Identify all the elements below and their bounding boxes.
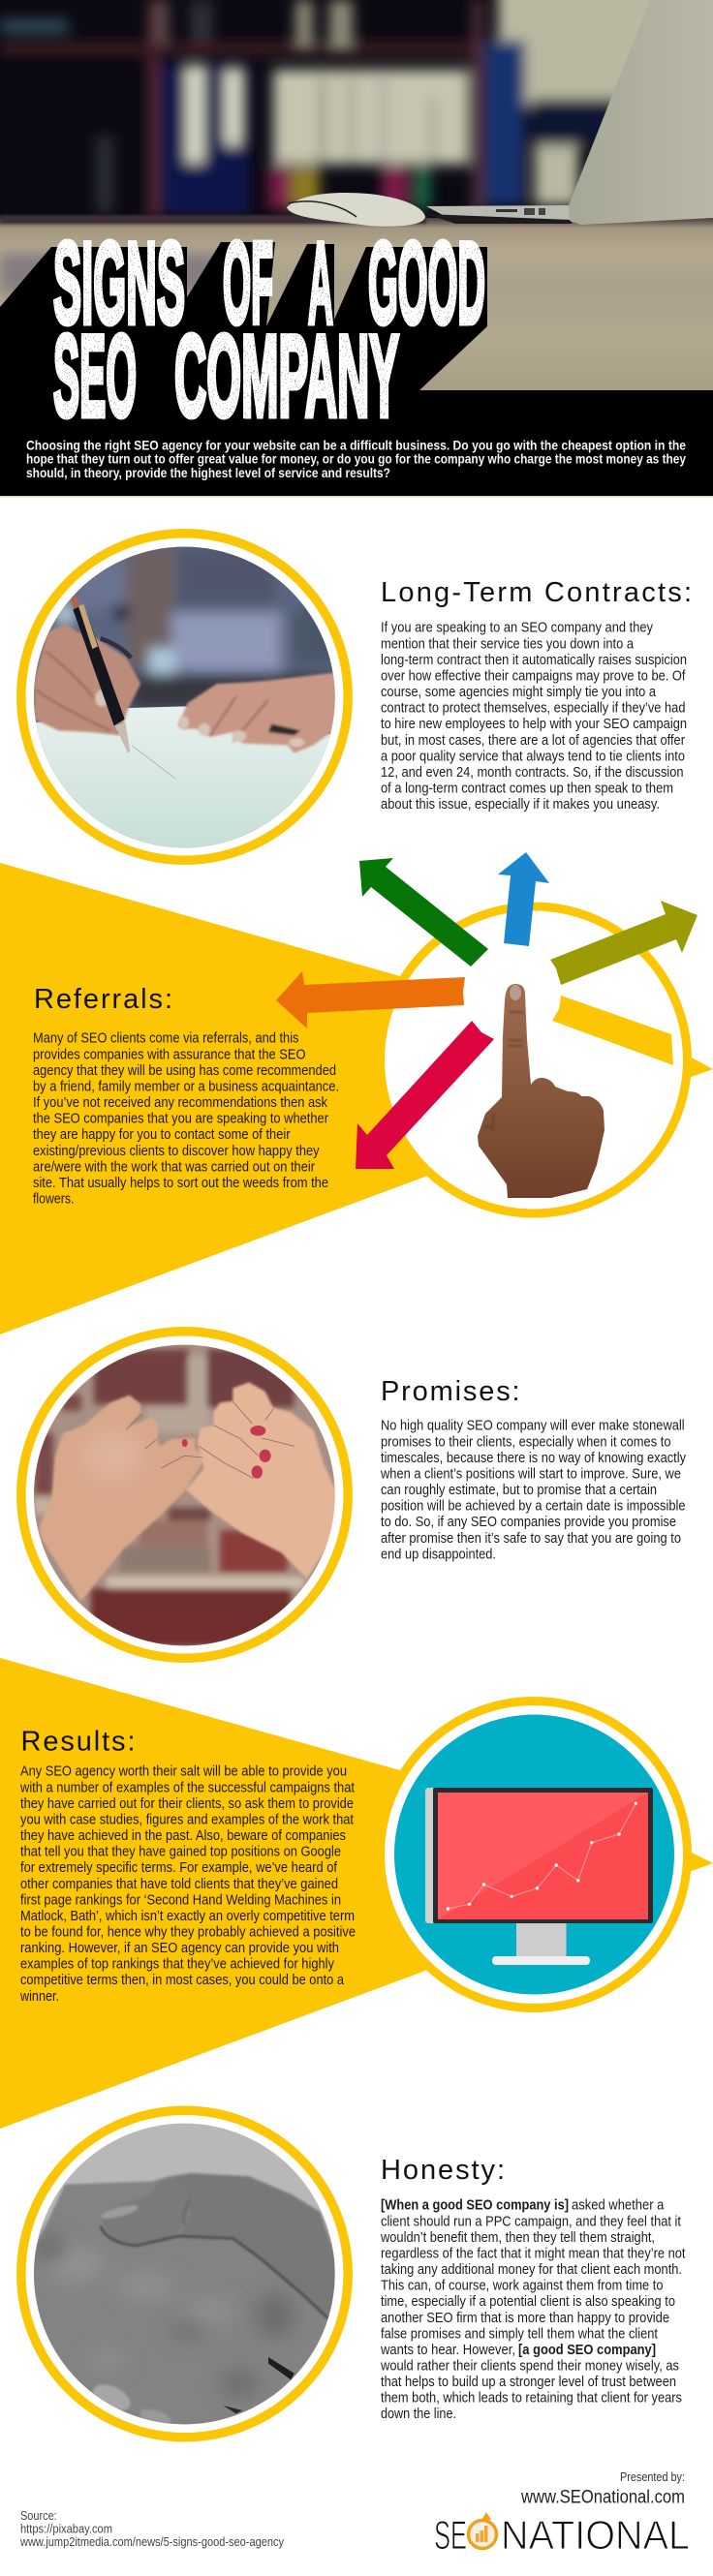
body text: for extremely specific terms. For example, we’ve heard of — [20, 1859, 338, 1876]
body text: about this issue, especially if it makes you uneasy. — [381, 796, 660, 813]
body text: This can, of course, work against them from time to — [381, 2278, 663, 2294]
photo: linked pinkies — [29, 1339, 339, 1649]
body text: they have achieved in the past. Also, beware of companies — [20, 1827, 346, 1844]
body text — [381, 620, 687, 813]
body text: course, some agencies might simply tie you into a — [381, 684, 657, 700]
body text: Any SEO agency worth their salt will be able to provide you — [20, 1763, 347, 1780]
body text: [When a good SEO company is] — [381, 2197, 569, 2214]
panel: honesty — [21, 2110, 686, 2438]
intro text: should, in theory, provide the highest level of service and results? — [26, 466, 390, 480]
nail polish — [182, 1426, 271, 1479]
body text: asked whether a — [572, 2197, 665, 2214]
body text — [33, 1030, 339, 1207]
arrow: yellow bar — [552, 996, 673, 1065]
title: SIGNS — [53, 219, 185, 349]
title: OF — [223, 219, 273, 349]
title — [53, 219, 485, 442]
circle frame — [376, 1697, 713, 2012]
body text: If you’ve not received any recommendations then ask — [33, 1094, 327, 1111]
panel: results — [0, 1658, 713, 2129]
body text: wants to hear. However, — [380, 2342, 515, 2358]
header photo: desk, laptop and mouse — [0, 0, 713, 392]
circle frame: pen on contract — [21, 534, 348, 860]
body text: existing/previous clients to discover how happy they — [33, 1143, 320, 1159]
yellow speech pointer — [0, 863, 534, 1334]
icon: laptop — [426, 0, 713, 225]
body text: wouldn’t benefit them, then they tell them straight, — [380, 2229, 655, 2246]
body text — [19, 1763, 356, 2005]
arrow: blue — [498, 852, 549, 946]
icon: logo O with bar chart and arrow — [469, 2512, 496, 2549]
header panel: GOOD — [368, 219, 485, 349]
body text: first page rankings for ‘Second Hand Welding Machines in — [20, 1891, 341, 1908]
body text: of a long-term contract comes up then speak to them — [381, 781, 673, 796]
body text: site. That usually helps to sort out the weeds from the — [33, 1175, 328, 1191]
body text: provides companies with assurance that the SEO — [33, 1046, 306, 1062]
body text: promises to their clients, especially when it comes to — [381, 1433, 670, 1450]
body text: they have carried out for their clients, so ask them to provide — [20, 1795, 354, 1812]
heading: Results: — [21, 1727, 136, 1758]
body text: [a good SEO company] — [518, 2342, 656, 2358]
body text: can roughly estimate, but to promise that a certain — [381, 1482, 657, 1498]
yellow speech pointer — [0, 1658, 534, 2129]
body text: agency that they will be using has come recommended — [33, 1062, 336, 1079]
body text: mention that their service ties you down into a — [381, 635, 635, 652]
icon: mouse — [287, 193, 425, 227]
body text: other companies that have told clients that they’ve gained — [20, 1876, 338, 1892]
footer: sources: Source: — [20, 2508, 57, 2523]
header panel — [0, 0, 713, 498]
title: A — [308, 219, 333, 349]
arrow: orange — [276, 971, 465, 1028]
body text: another SEO firm that is more than happy to provide — [381, 2310, 669, 2326]
circle frame: handshake — [21, 2110, 348, 2438]
intro text — [26, 438, 686, 480]
body text: that tell you that they have gained top positions on Google — [20, 1844, 341, 1860]
heading: Referrals: — [34, 984, 172, 1015]
body text: competitive terms then, in most cases, you could be onto a — [20, 1972, 345, 1988]
body text: to be found for, hence why they probably achieved a positive — [20, 1923, 356, 1941]
heading: Long-Term Contracts: — [381, 577, 692, 608]
arrow: olive — [550, 901, 698, 985]
footer: sources — [19, 2508, 284, 2549]
body text: winner. — [19, 1988, 59, 2005]
body text: with a number of examples of the successful campaigns that — [19, 1779, 356, 1795]
photo: handshake in grayscale — [29, 2118, 339, 2428]
panel: referrals — [0, 852, 713, 1334]
body text — [380, 1418, 686, 1562]
arrow: green — [359, 858, 488, 966]
body text: they are happy for you to contact some of their — [33, 1126, 291, 1143]
footer: presented by: Presented by: — [620, 2469, 685, 2484]
body text: ranking. However, if an SEO agency can provide you with — [20, 1940, 339, 1956]
icon: hand pointing up — [478, 984, 604, 1198]
body text: false promises and simply tell them what the client — [381, 2325, 659, 2342]
circle frame: pinky promise — [21, 1332, 348, 1658]
photo: hands signing contract — [29, 541, 339, 851]
body text: Many of SEO clients come via referrals, and this — [33, 1030, 298, 1047]
body text: down the line. — [381, 2406, 456, 2422]
header black banner with long shadow — [0, 242, 713, 496]
icon: monitor with line chart — [425, 1788, 653, 1965]
body text: flowers. — [33, 1191, 74, 1207]
body text: Matlock, Bath’, which isn’t exactly an overly competitive term — [20, 1908, 355, 1924]
title: SEO — [53, 312, 137, 442]
body text: are/were with the work that was carried out on their — [33, 1158, 315, 1175]
footer: sources: https://pixabay.com — [20, 2522, 112, 2535]
body text: If you are speaking to an SEO company and they — [381, 620, 653, 636]
panel: promises — [21, 1332, 686, 1658]
heading: Promises: — [381, 1376, 520, 1407]
arrow: red — [356, 1021, 494, 1169]
logo: SEO National: NATIONAL — [501, 2512, 690, 2558]
circle frame — [376, 903, 713, 1218]
panel: long-term contracts — [21, 534, 692, 860]
logo: SEO National: SE — [434, 2512, 467, 2558]
body text: the SEO companies that you are speaking to whether — [33, 1111, 328, 1127]
body text: you with case studies, figures and examples of the work that — [20, 1811, 355, 1827]
footer: sources: www.jump2itmedia.com/news/5-signs-good-seo-agency — [19, 2534, 284, 2549]
body text: by a friend, family member or a business acquaintance. — [33, 1078, 339, 1094]
heading: Honesty: — [381, 2155, 505, 2186]
body text: examples of top rankings that they’ve achieved for highly — [20, 1956, 334, 1973]
pen — [71, 595, 174, 778]
body text: end up disappointed. — [381, 1546, 496, 1562]
footer: presented by — [520, 2469, 685, 2508]
body text — [380, 2197, 686, 2422]
footer: presented by: www.SEOnational.com — [520, 2487, 685, 2508]
